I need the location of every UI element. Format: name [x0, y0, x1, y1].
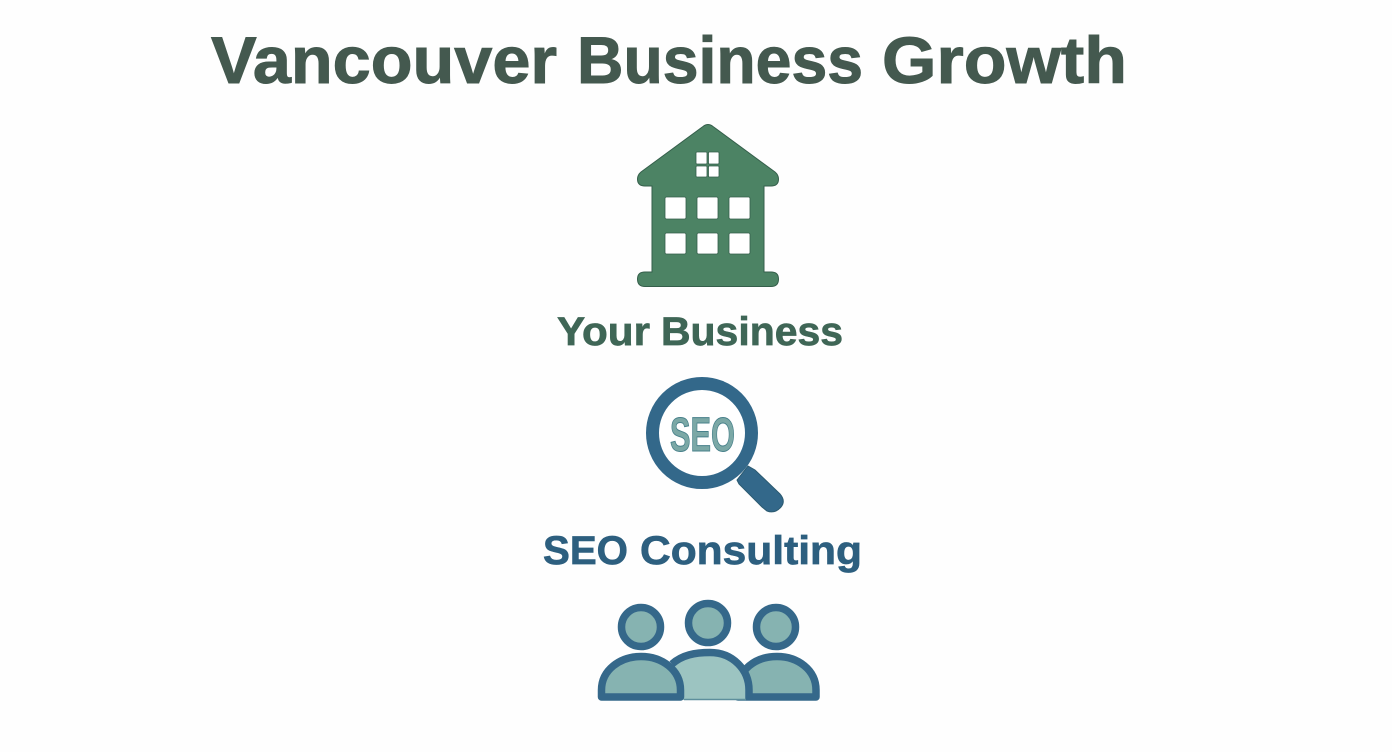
- right person: [738, 608, 816, 697]
- label: your business: [557, 310, 843, 354]
- icon: business building: [638, 124, 778, 286]
- icon: SEO magnifying glass: SEO: [670, 409, 735, 462]
- icon: customers group: [602, 604, 816, 700]
- label: seo consulting: [543, 529, 862, 573]
- icon: SEO magnifying glass: [652, 384, 783, 512]
- label: your business: Your: [557, 310, 650, 354]
- title: Business: [577, 23, 863, 97]
- label: seo consulting: SEO: [543, 529, 628, 573]
- title: [211, 23, 1127, 97]
- centre person: [672, 604, 749, 700]
- label: seo consulting: Consulting: [640, 529, 862, 573]
- title: Growth: [882, 23, 1127, 97]
- label: your business: Business: [661, 310, 843, 354]
- title: Vancouver: [211, 23, 557, 97]
- left person: [602, 608, 680, 697]
